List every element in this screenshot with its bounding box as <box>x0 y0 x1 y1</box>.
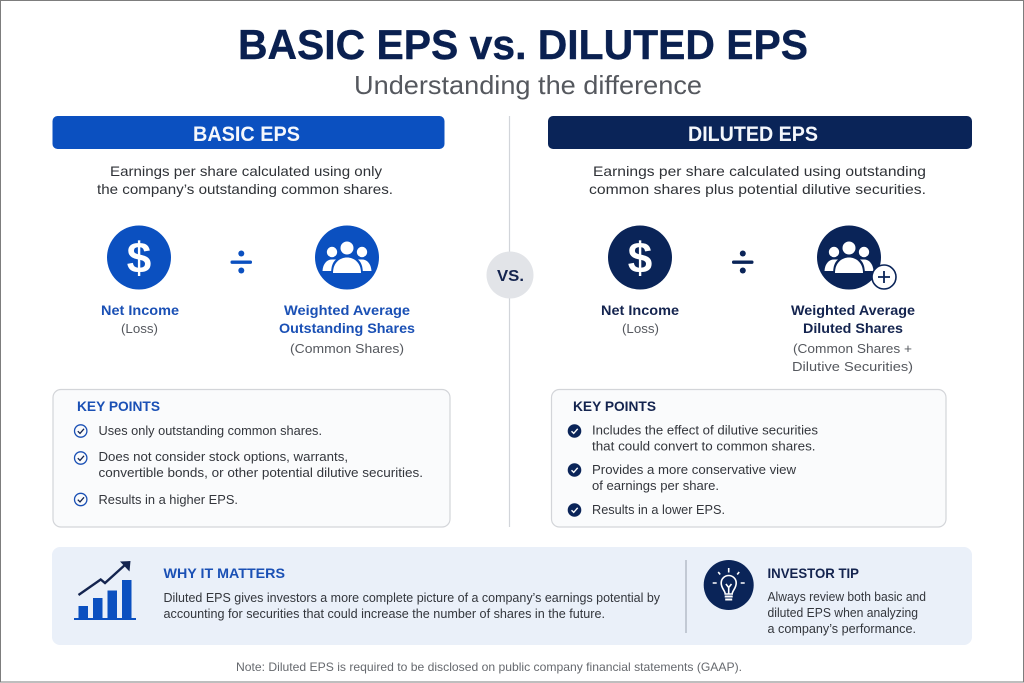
label: weighted average outstanding shares: Outstanding Shares <box>279 320 415 336</box>
diluted EPS definition <box>589 163 926 197</box>
diluted point 1: that could convert to common shares. <box>592 440 816 454</box>
icon: light bulb <box>704 560 754 610</box>
investor tip <box>768 565 926 636</box>
subtitle: Understanding the difference <box>354 70 702 100</box>
investor tip: INVESTOR TIP <box>768 565 859 581</box>
why it matters: accounting for securities that could increase the number of shares in the future. <box>164 607 605 621</box>
basic point 2 <box>74 450 423 480</box>
icon: dollar: $ <box>628 234 652 283</box>
why it matters: Diluted EPS gives investors a more complete picture of a company’s earnings potential by <box>164 591 661 605</box>
panel: basic key points <box>53 390 450 527</box>
icon: divide <box>230 250 252 274</box>
label: net income <box>601 302 679 336</box>
label: weighted average outstanding shares: Weighted Average <box>284 302 410 318</box>
label: weighted average diluted shares <box>791 302 915 374</box>
label: net income: Net Income <box>101 302 179 318</box>
basic EPS header <box>52 116 444 149</box>
label: weighted average diluted shares: Diluted Shares <box>803 320 903 336</box>
footnote: Note: Diluted EPS is required to be disclosed on public company financial statements (GAAP). <box>236 660 742 674</box>
basic EPS header: BASIC EPS <box>193 123 300 146</box>
panel: diluted key points: KEY POINTS <box>573 398 656 414</box>
basic point 2: convertible bonds, or other potential dilutive securities. <box>98 466 423 480</box>
panel: bottom callout <box>52 547 972 645</box>
label: weighted average diluted shares: Dilutive Securities) <box>792 359 913 374</box>
basic EPS definition: the company’s outstanding common shares. <box>97 181 393 197</box>
title: BASIC EPS vs. DILUTED EPS <box>238 21 808 68</box>
basic point 3: Results in a higher EPS. <box>98 493 238 507</box>
label: net income: (Loss) <box>622 321 659 336</box>
diluted point 3: Results in a lower EPS. <box>592 503 725 517</box>
investor tip: diluted EPS when analyzing <box>768 606 918 620</box>
diluted point 2: of earnings per share. <box>592 479 719 493</box>
diluted point 2: Provides a more conservative view <box>592 463 797 477</box>
panel: basic key points: KEY POINTS <box>77 398 160 414</box>
label: net income <box>101 302 179 336</box>
why it matters <box>164 565 661 621</box>
why it matters: WHY IT MATTERS <box>164 565 285 581</box>
VS badge <box>486 252 534 298</box>
panel: diluted EPS <box>548 116 972 527</box>
icon: shareholders plus <box>817 226 896 290</box>
basic EPS definition: Earnings per share calculated using only <box>110 163 382 179</box>
diluted point 1 <box>568 424 818 454</box>
label: net income: (Loss) <box>121 321 158 336</box>
panel: basic EPS <box>52 116 450 527</box>
basic point 2: Does not consider stock options, warrants, <box>98 450 348 464</box>
icon: divide <box>732 250 754 274</box>
label: weighted average diluted shares: Weighted Average <box>791 302 915 318</box>
basic EPS definition <box>97 163 393 197</box>
VS badge: VS. <box>497 268 524 285</box>
icon: dollar: $ <box>127 234 151 283</box>
diluted point 2 <box>568 463 797 493</box>
label: net income: Net Income <box>601 302 679 318</box>
investor tip: Always review both basic and <box>768 590 926 604</box>
icon: growth chart <box>74 561 136 620</box>
icon: shareholders <box>315 226 379 290</box>
diluted EPS header <box>548 116 972 149</box>
basic point 1: Uses only outstanding common shares. <box>98 424 322 438</box>
panel: diluted key points <box>552 390 946 527</box>
diluted EPS definition: Earnings per share calculated using outstanding <box>593 163 926 179</box>
investor tip: a company’s performance. <box>768 622 916 636</box>
icon: dollar <box>107 226 171 290</box>
diluted EPS header: DILUTED EPS <box>688 123 818 146</box>
diluted EPS definition: common shares plus potential dilutive securities. <box>589 181 926 197</box>
label: weighted average outstanding shares: (Common Shares) <box>290 341 404 356</box>
label: weighted average outstanding shares <box>279 302 415 356</box>
icon: dollar <box>608 226 672 290</box>
label: weighted average diluted shares: (Common Shares + <box>793 341 912 356</box>
diluted point 1: Includes the effect of dilutive securities <box>592 424 818 438</box>
